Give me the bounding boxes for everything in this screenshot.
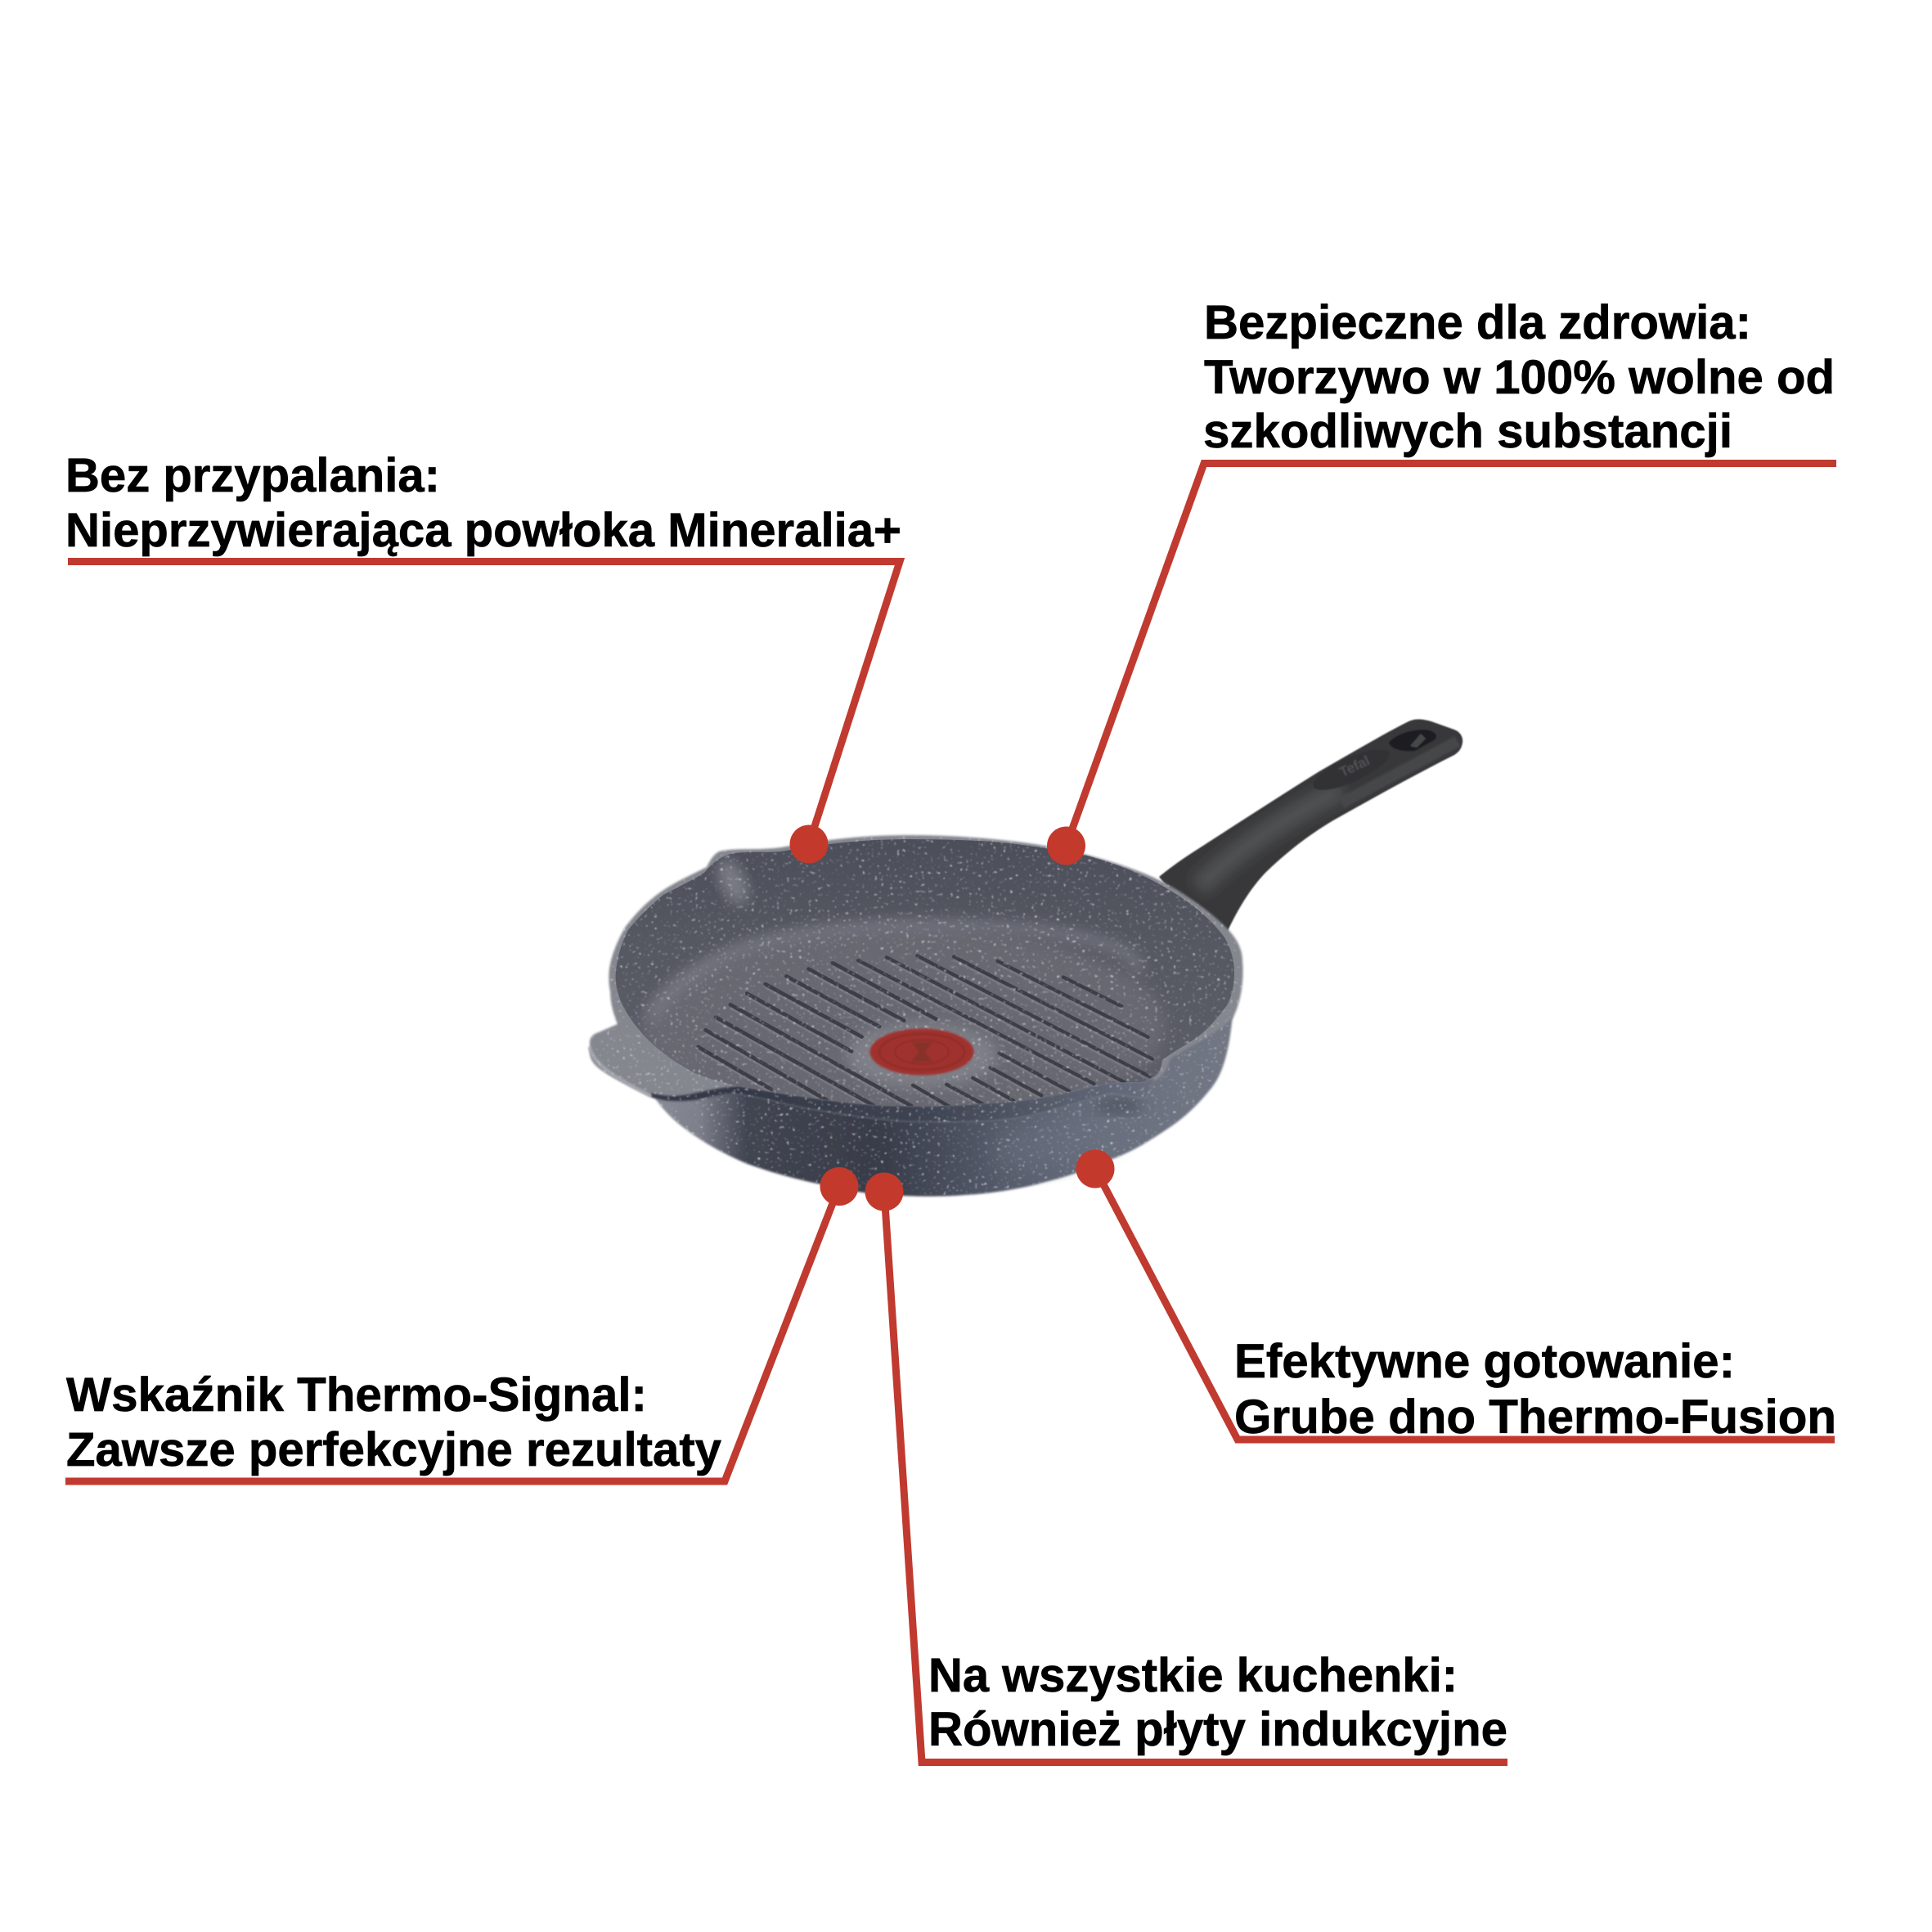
callout text: Zawsze perfekcyjne rezultaty bbox=[66, 1423, 721, 1476]
callout text bbox=[65, 449, 901, 557]
handle logo text: Tefal bbox=[1337, 753, 1373, 780]
body light patch bbox=[986, 1105, 1124, 1177]
handle hanging hole bbox=[1389, 730, 1436, 751]
grill grooves, right half bbox=[858, 956, 1152, 1107]
handle logo plate bbox=[1308, 742, 1395, 798]
marker dot bbox=[1076, 1150, 1114, 1188]
pouring spout highlight bbox=[713, 856, 753, 907]
callout: Na wszystkie kuchenki bbox=[865, 1173, 1507, 1762]
leader line bbox=[1067, 463, 1836, 846]
light centre of floor bbox=[847, 1022, 997, 1088]
callout text bbox=[66, 1368, 721, 1476]
thermo-signal red disc bbox=[870, 1029, 973, 1075]
rim and pouring lips bbox=[590, 835, 1243, 1122]
callout text: Tworzywo w 100% wolne od bbox=[1204, 351, 1835, 404]
leader line bbox=[65, 1186, 839, 1481]
shadow under right spout bbox=[1094, 1099, 1143, 1113]
speckled mineral coating bbox=[585, 830, 1247, 1202]
callout text: Na wszystkie kuchenki: bbox=[928, 1649, 1458, 1702]
callout text: Wskaźnik Thermo-Signal: bbox=[66, 1368, 647, 1422]
pan product illustration bbox=[585, 719, 1462, 1202]
grill grooves, left half bbox=[699, 963, 937, 1106]
leader line bbox=[884, 1192, 1507, 1762]
raised floor ridge bbox=[650, 925, 1139, 1018]
hourglass symbol bbox=[911, 1042, 932, 1062]
pan handle bbox=[1159, 719, 1462, 932]
leader line bbox=[68, 561, 900, 844]
callout: Efektywne gotowanie bbox=[1076, 1150, 1836, 1444]
callout text: Grube dno Thermo-Fusion bbox=[1234, 1391, 1836, 1444]
callout text bbox=[1203, 296, 1835, 458]
pan interior bbox=[615, 839, 1234, 1106]
grill groove highlights, right half bbox=[858, 959, 1152, 1110]
marker dot bbox=[865, 1173, 903, 1211]
callout: Wskaźnik Thermo-Signal bbox=[65, 1167, 859, 1481]
handle sheen bbox=[1198, 741, 1458, 887]
callout text bbox=[928, 1649, 1507, 1756]
callout text: szkodliwych substancji bbox=[1203, 405, 1732, 458]
front lip band bbox=[651, 1078, 1154, 1122]
marker dot bbox=[820, 1167, 859, 1206]
callout text: Również płyty indukcyjne bbox=[928, 1703, 1507, 1756]
grill groove highlights, left half bbox=[699, 966, 937, 1109]
interior floor bbox=[644, 929, 1165, 1106]
marker dot bbox=[790, 824, 828, 864]
callout text: Nieprzywierająca powłoka Mineralia+ bbox=[65, 504, 901, 557]
callout: Bez przypalania bbox=[65, 449, 901, 864]
callout: Bezpieczne dla zdrowia bbox=[1047, 296, 1836, 865]
leader line bbox=[1095, 1169, 1835, 1440]
callout text bbox=[1234, 1335, 1836, 1444]
marker dot bbox=[1047, 826, 1085, 865]
callout text: Bez przypalania: bbox=[65, 449, 440, 502]
left handle tab highlight bbox=[590, 1047, 651, 1096]
pan outer body bbox=[651, 1014, 1233, 1197]
callout text: Bezpieczne dla zdrowia: bbox=[1204, 296, 1751, 349]
callout text: Efektywne gotowanie: bbox=[1234, 1335, 1735, 1388]
